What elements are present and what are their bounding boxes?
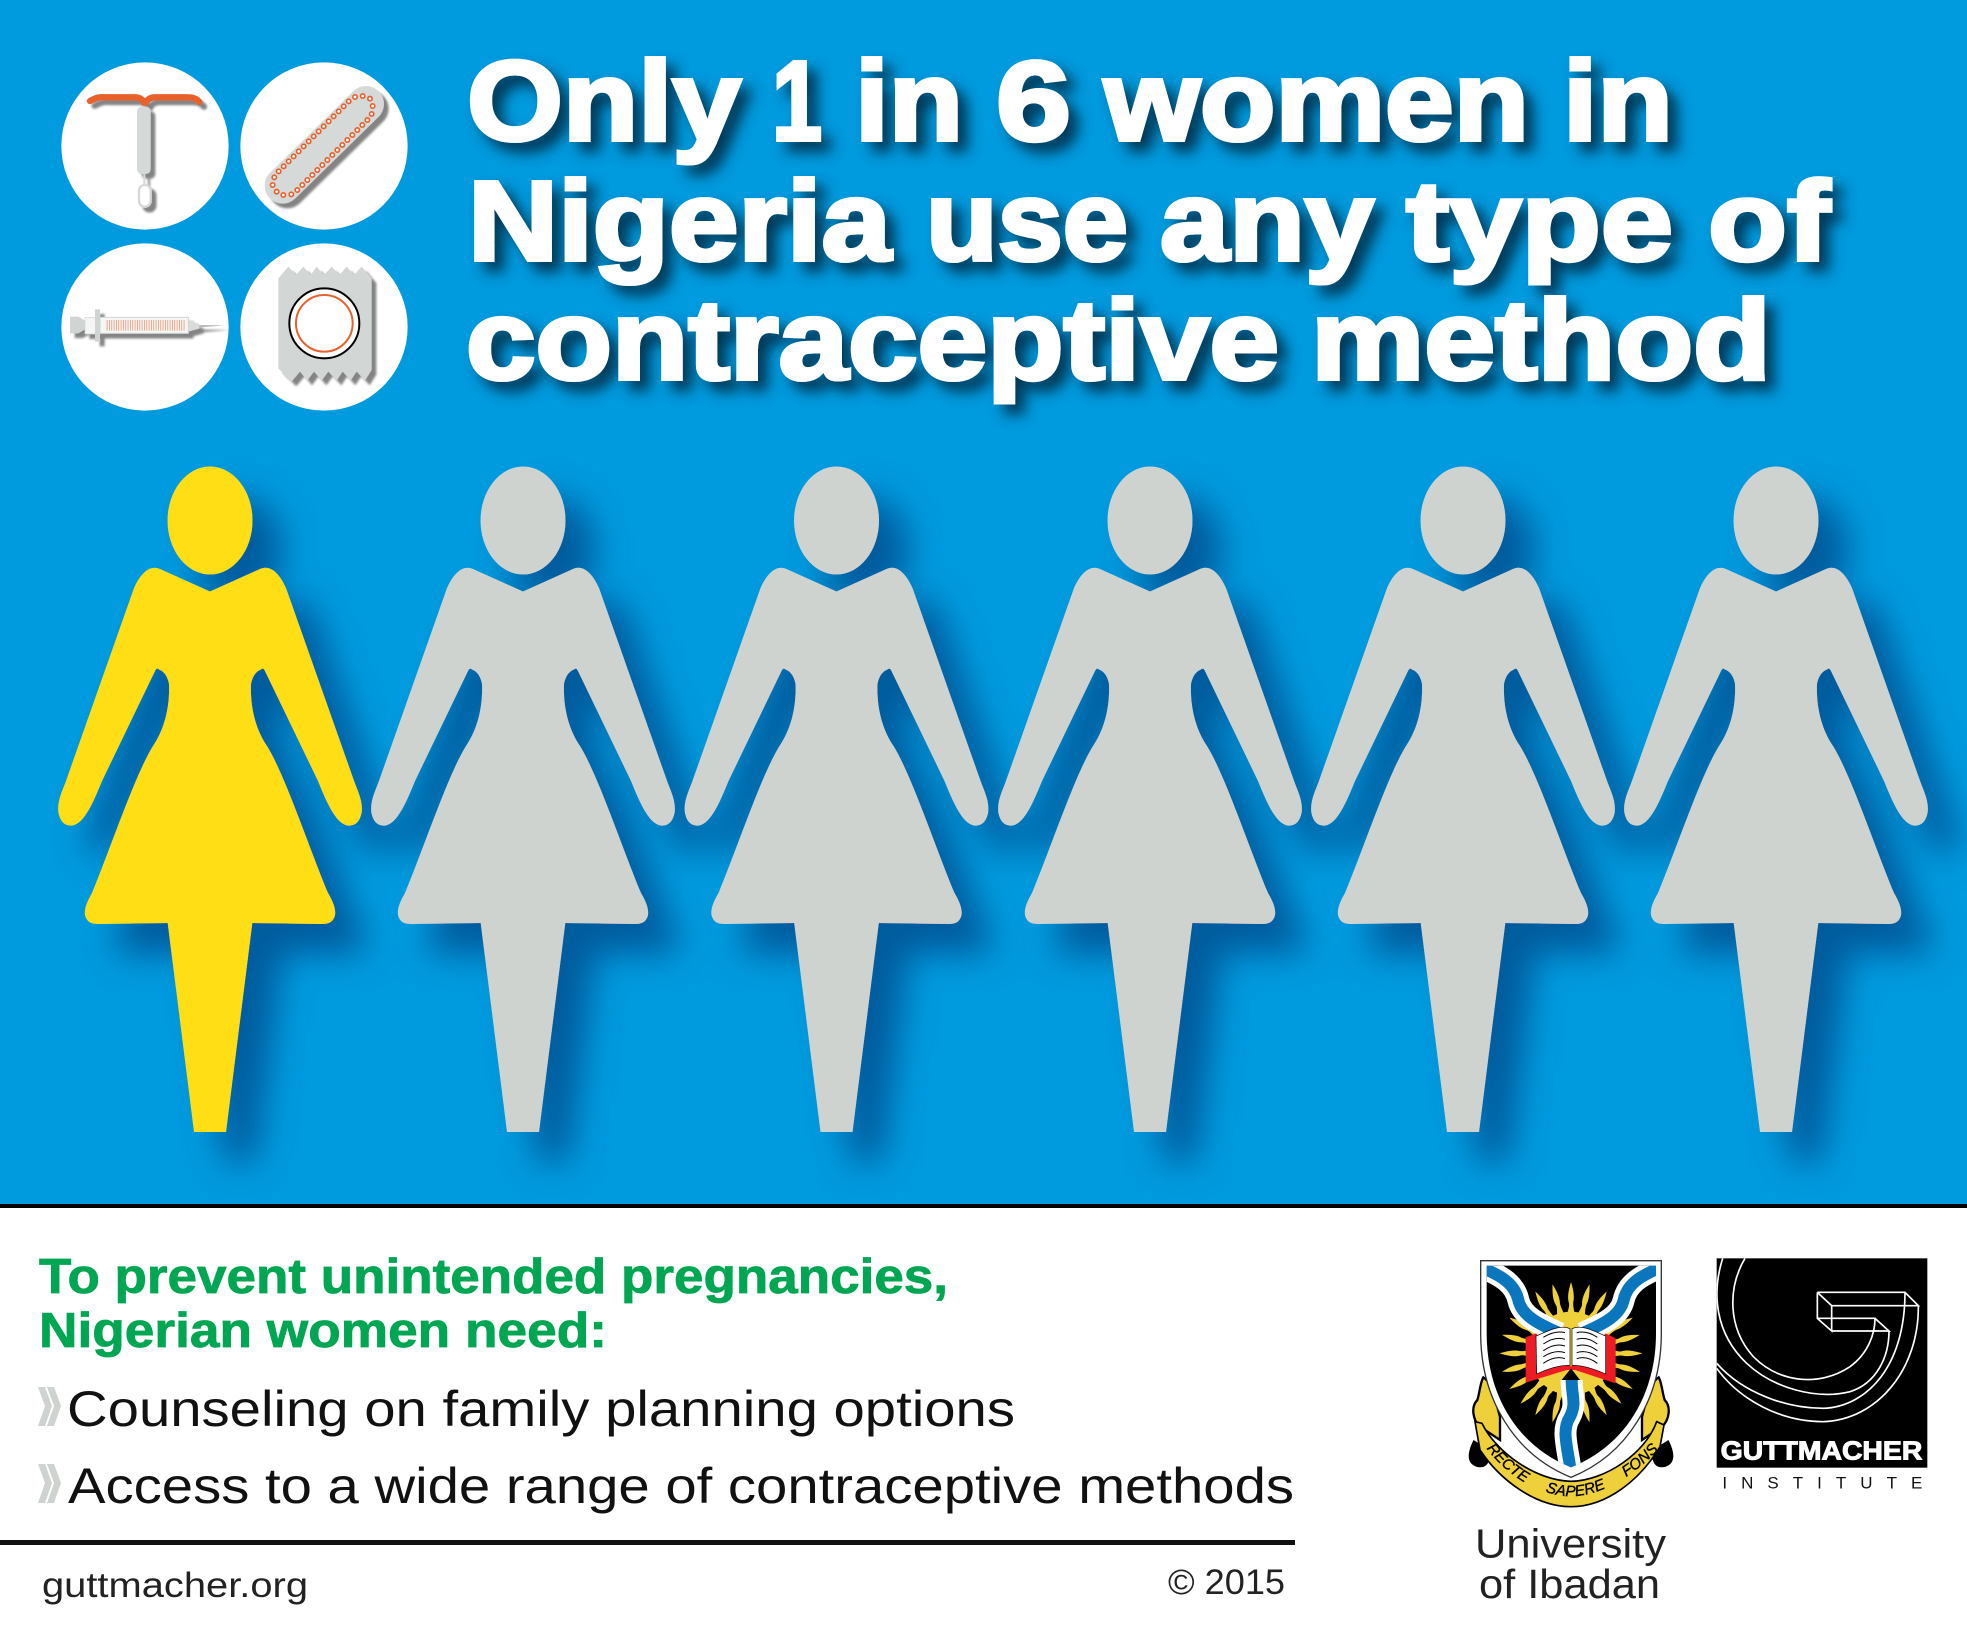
title: any [1160, 158, 1374, 284]
logo: Guttmacher Institute: INSTITUTE [1722, 1473, 1922, 1492]
label: University of Ibadan [1475, 1520, 1667, 1607]
logo: University of Ibadan crest [1468, 1260, 1674, 1508]
title: women [1103, 38, 1529, 164]
title: Nigeria [468, 158, 892, 284]
bullet: counseling: Counseling on family planning options [67, 1381, 1015, 1437]
crest motto ribbon: SAPERE [1546, 1478, 1605, 1496]
contraceptive icons group [61, 62, 408, 411]
title: method [1311, 277, 1771, 403]
crest motto ribbon: FONS [1622, 1443, 1657, 1477]
footer rule [0, 1540, 1295, 1545]
crest supporters [1470, 1377, 1672, 1466]
crest sun rays [1500, 1282, 1642, 1425]
woman 3: grey [685, 466, 988, 1132]
title: contraceptive [466, 277, 1279, 403]
title: in [855, 38, 963, 164]
footer: copyright: © 2015 [1168, 1563, 1285, 1602]
logo: Guttmacher Institute [1717, 1258, 1927, 1492]
title: in [1563, 38, 1673, 164]
divider: black rule under blue panel [0, 1204, 1967, 1208]
title: 6 [996, 38, 1071, 164]
panel: white lower section [0, 1204, 1967, 1642]
woman 4: grey [998, 466, 1302, 1132]
icon: syringe [61, 243, 229, 411]
woman 5: grey [1311, 466, 1615, 1132]
label: University of Ibadan: of Ibadan [1479, 1561, 1660, 1607]
bullet: access: Access to a wide range of contraceptive methods [68, 1458, 1294, 1514]
title: use [926, 158, 1128, 284]
crest open book [1526, 1327, 1616, 1383]
heading: green call to action: Nigerian women need: [39, 1304, 607, 1358]
icon: chevron bullet [38, 1464, 61, 1503]
title: of [1708, 158, 1830, 284]
woman 2: grey [371, 466, 675, 1132]
heading: green call to action [39, 1250, 948, 1358]
logo: Guttmacher Institute: GUTTMACHER [1721, 1437, 1922, 1465]
panel: blue background [0, 0, 1967, 1204]
title: 1 [772, 38, 822, 164]
crest shield [1481, 1261, 1661, 1477]
label: University of Ibadan: University [1475, 1520, 1667, 1566]
pictogram: six women, one highlighted [58, 466, 1928, 1132]
heading: green call to action: To prevent unintended pregnancies, [39, 1250, 948, 1304]
icon: IUD [61, 62, 229, 230]
title [466, 38, 1830, 403]
icon: pill pack [240, 62, 408, 230]
title: Only [467, 38, 741, 164]
crest motto ribbon: RECTE [1486, 1444, 1531, 1482]
crest motto ribbon [1474, 1420, 1665, 1508]
icon: chevron bullet [38, 1387, 61, 1426]
crest rivers [1483, 1268, 1659, 1470]
woman 1: yellow, uses contraception [58, 466, 362, 1132]
footer: website: guttmacher.org [42, 1566, 308, 1605]
woman 6: grey [1624, 466, 1928, 1132]
icon: condom wrapper [240, 243, 408, 411]
title: type [1406, 158, 1673, 284]
